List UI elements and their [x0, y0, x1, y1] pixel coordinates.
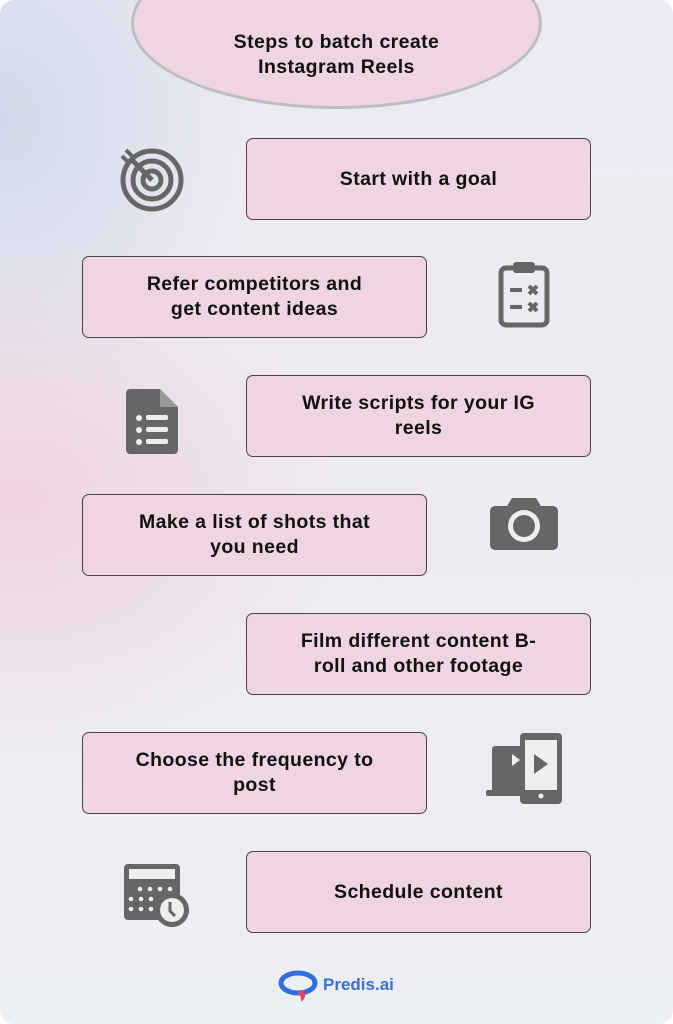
- step 7: [246, 851, 591, 933]
- title ellipse: Instagram Reels: [258, 56, 415, 78]
- logo: Predis.ai: [323, 975, 394, 994]
- step 6: post: [233, 774, 276, 796]
- step 2: Refer competitors and: [147, 273, 362, 295]
- title ellipse: [131, 0, 542, 109]
- icon: camera: [490, 498, 558, 550]
- step 3: [246, 375, 591, 457]
- step 2: get content ideas: [171, 298, 338, 320]
- step 6: [82, 732, 427, 814]
- title ellipse: Steps to batch create: [234, 31, 439, 53]
- step 7: Schedule content: [334, 880, 503, 902]
- step 4: [82, 494, 427, 576]
- icon: devices: [486, 733, 562, 804]
- step 3: reels: [395, 417, 442, 439]
- step 4: Make a list of shots that: [139, 511, 370, 533]
- step 1: Start with a goal: [340, 168, 497, 190]
- step 6: Choose the frequency to: [136, 749, 373, 771]
- step 5: roll and other footage: [314, 655, 523, 677]
- icon: target: [120, 148, 184, 212]
- icon: clipboard: [498, 262, 550, 328]
- step 3: Write scripts for your IG: [302, 392, 535, 414]
- step 2: [82, 256, 427, 338]
- icon: calendar clock: [124, 864, 189, 927]
- icon: document list: [126, 389, 178, 454]
- logo: [278, 970, 394, 1002]
- step 1: [246, 138, 591, 220]
- step 5: Film different content B-: [301, 630, 536, 652]
- step 4: you need: [210, 536, 299, 558]
- step 5: [246, 613, 591, 695]
